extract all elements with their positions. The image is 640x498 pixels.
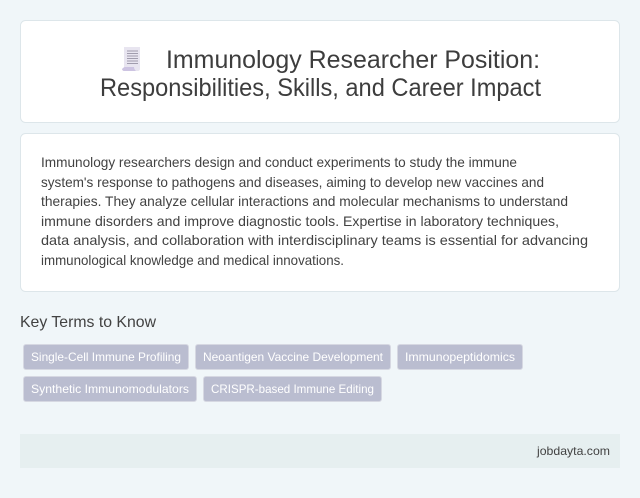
tag: Synthetic Immunomodulators: Synthetic Immunomodulators [31,382,189,396]
icon: document scroll [122,47,140,71]
tag: Immunopeptidomics: Immunopeptidomics [405,350,515,364]
title: Responsibilities, Skills, and Career Impact [100,74,541,102]
tag: Immunopeptidomics [398,344,522,370]
tag: Single-Cell Immune Profiling [24,344,188,370]
text block: description: system's response to pathogens and diseases, aiming to develop new vaccines and [41,174,544,190]
text block: description: data analysis, and collaboration with interdisciplinary teams is essential for advancing [41,232,588,248]
text block: description: therapies. They analyze cellular interactions and molecular mechanisms to understand [41,193,568,209]
footer [20,434,620,468]
tag: Neoantigen Vaccine Development: Neoantigen Vaccine Development [203,350,384,364]
tag: Single-Cell Immune Profiling: Single-Cell Immune Profiling [31,350,181,364]
footer: site name: jobdayta.com [536,444,610,458]
panel: title card [20,20,620,122]
tag: Neoantigen Vaccine Development [196,344,390,370]
panel: description [20,134,620,292]
text block: description: Immunology researchers design and conduct experiments to study the immune [41,154,517,170]
tag: CRISPR-based Immune Editing [204,376,382,402]
tag: Synthetic Immunomodulators [24,376,196,402]
text block: description [41,154,588,268]
text block: description: immune disorders and improve diagnostic tools. Expertise in laboratory techniques, [41,213,559,229]
heading: key terms: Key Terms to Know [20,314,156,331]
title [100,46,541,102]
tag: CRISPR-based Immune Editing: CRISPR-based Immune Editing [211,382,374,396]
text block: description: immunological knowledge and medical innovations. [41,252,344,268]
title: Immunology Researcher Position: [166,46,540,74]
